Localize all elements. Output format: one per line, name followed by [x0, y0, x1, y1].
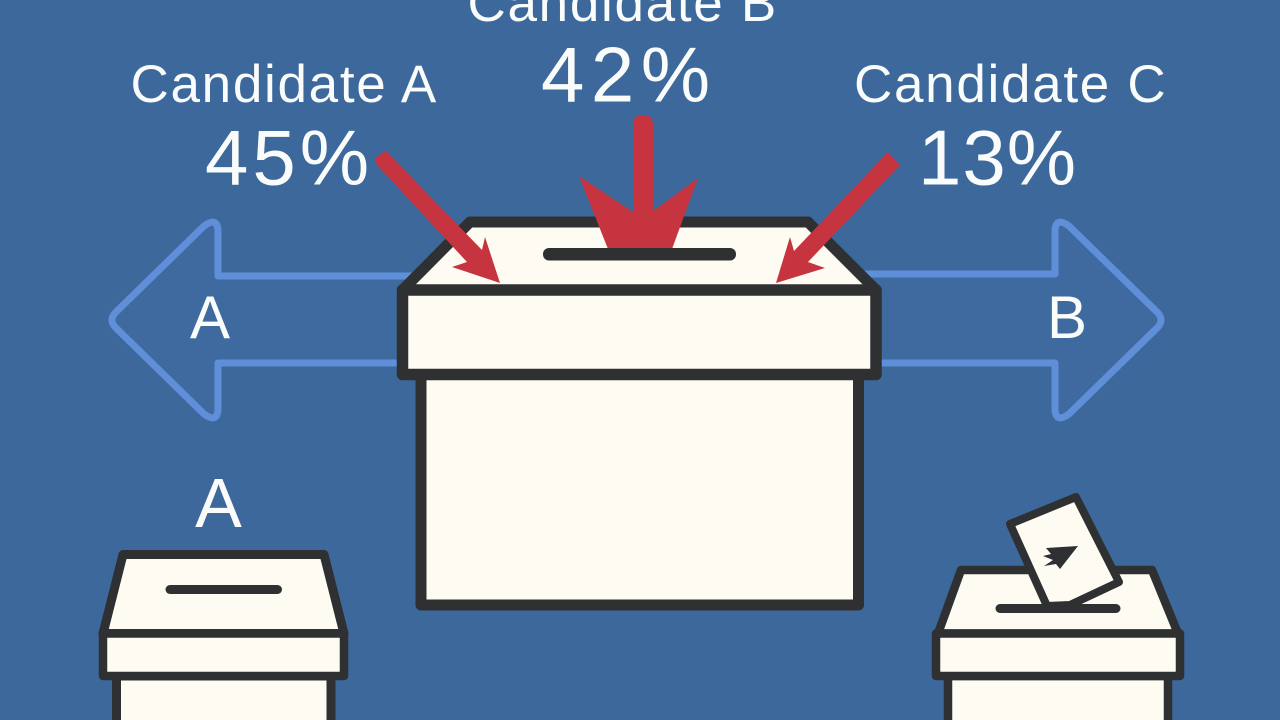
arrow: red from B — [579, 115, 698, 249]
box lid top — [402, 222, 876, 290]
box body — [421, 374, 858, 605]
label: candidate A: 45% — [205, 114, 373, 202]
small ballot box A — [103, 554, 344, 720]
small lid top — [103, 554, 344, 634]
small box body — [948, 676, 1168, 720]
letter A: A — [195, 464, 242, 542]
arrow: red from A — [375, 151, 500, 283]
label: candidate B — [468, 0, 778, 118]
ballot paper — [1010, 497, 1119, 606]
small slot — [996, 604, 1120, 613]
arrow: left A — [112, 222, 440, 418]
small lid front — [103, 634, 344, 676]
central ballot box — [402, 222, 876, 605]
arrow: red from C — [776, 152, 900, 283]
box lid front — [402, 290, 876, 374]
label: candidate C — [854, 55, 1167, 202]
label: candidate A — [130, 55, 438, 202]
small slot — [166, 585, 282, 594]
small lid front — [936, 634, 1180, 676]
small lid top — [938, 570, 1178, 634]
ballot arrow — [1043, 546, 1078, 569]
small box body — [116, 676, 331, 720]
arrow: left A: A — [190, 284, 230, 351]
central box slot — [543, 248, 736, 260]
label: candidate C: 13% — [918, 114, 1077, 202]
small ballot box B with ballot — [936, 497, 1180, 720]
arrow: right B: B — [1047, 284, 1087, 351]
label: candidate C: Candidate C — [854, 55, 1167, 114]
label: candidate B: 42% — [541, 30, 717, 118]
arrow: right B — [840, 222, 1161, 418]
label: candidate A: Candidate A — [130, 55, 438, 114]
